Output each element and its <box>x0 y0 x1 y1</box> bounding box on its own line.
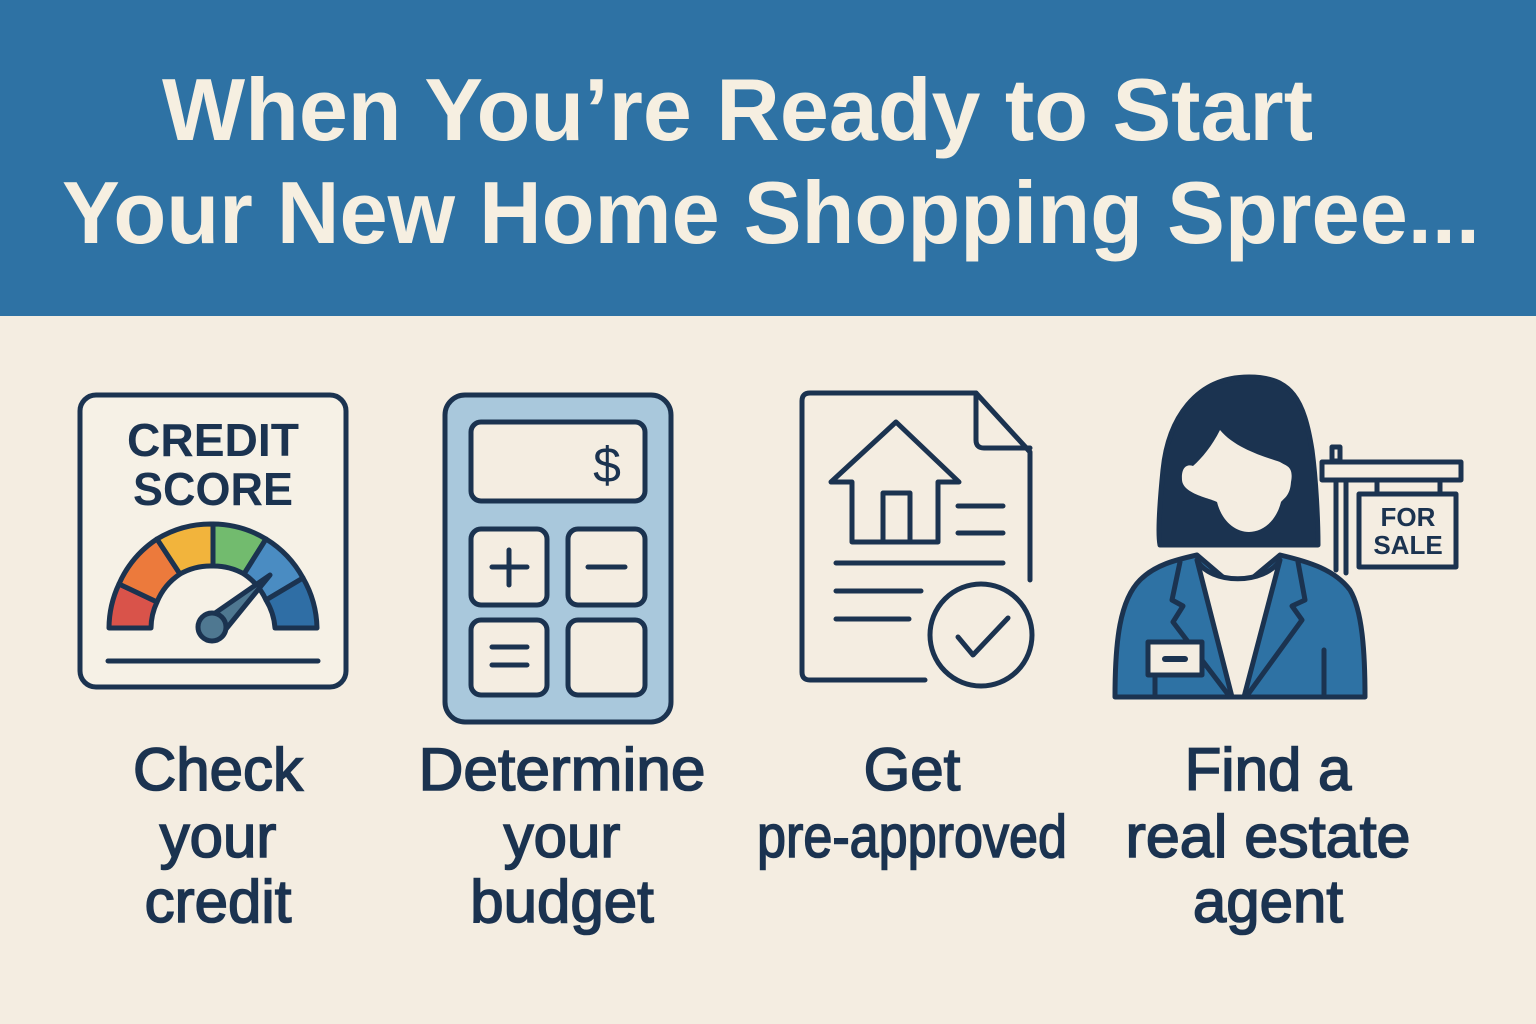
icon: credit score card: SCORE <box>133 463 293 515</box>
shirt <box>1197 560 1280 697</box>
caption: check your credit: credit <box>145 868 292 935</box>
header banner <box>0 0 1536 316</box>
sign: SALE <box>1373 530 1443 560</box>
title: Your New Home Shopping Spree... <box>62 163 1480 262</box>
caption: find a real estate agent: agent <box>1193 868 1343 935</box>
sign: FOR <box>1381 502 1436 532</box>
name badge <box>1148 642 1202 675</box>
caption: check your credit: your <box>160 803 276 870</box>
icon: calculator: $ <box>593 437 621 493</box>
icon: real estate agent <box>1115 377 1461 697</box>
face <box>1182 430 1292 532</box>
caption: find a real estate agent: Find a <box>1185 736 1352 803</box>
icon: credit score card <box>80 395 346 687</box>
title: When You’re Ready to Start <box>162 60 1313 159</box>
caption: determine your budget <box>418 736 706 935</box>
title <box>62 60 1480 262</box>
caption: determine your budget: budget <box>470 868 654 935</box>
caption: check your credit: Check <box>133 736 304 803</box>
icon: calculator <box>445 395 671 722</box>
caption: get pre-approved: pre-approved <box>757 803 1067 870</box>
sign <box>1322 447 1461 573</box>
icon: credit score card: CREDIT <box>127 414 299 466</box>
caption: check your credit <box>133 736 304 935</box>
icon: pre-approval document <box>802 393 1032 686</box>
caption: determine your budget: Determine <box>418 736 706 803</box>
gauge <box>109 524 317 641</box>
hair <box>1159 377 1318 545</box>
caption: find a real estate agent: real estate <box>1126 803 1410 870</box>
caption: determine your budget: your <box>504 803 620 870</box>
caption: find a real estate agent <box>1126 736 1410 935</box>
caption: get pre-approved: Get <box>864 736 961 803</box>
caption: get pre-approved <box>757 736 1067 870</box>
jacket <box>1115 555 1365 697</box>
